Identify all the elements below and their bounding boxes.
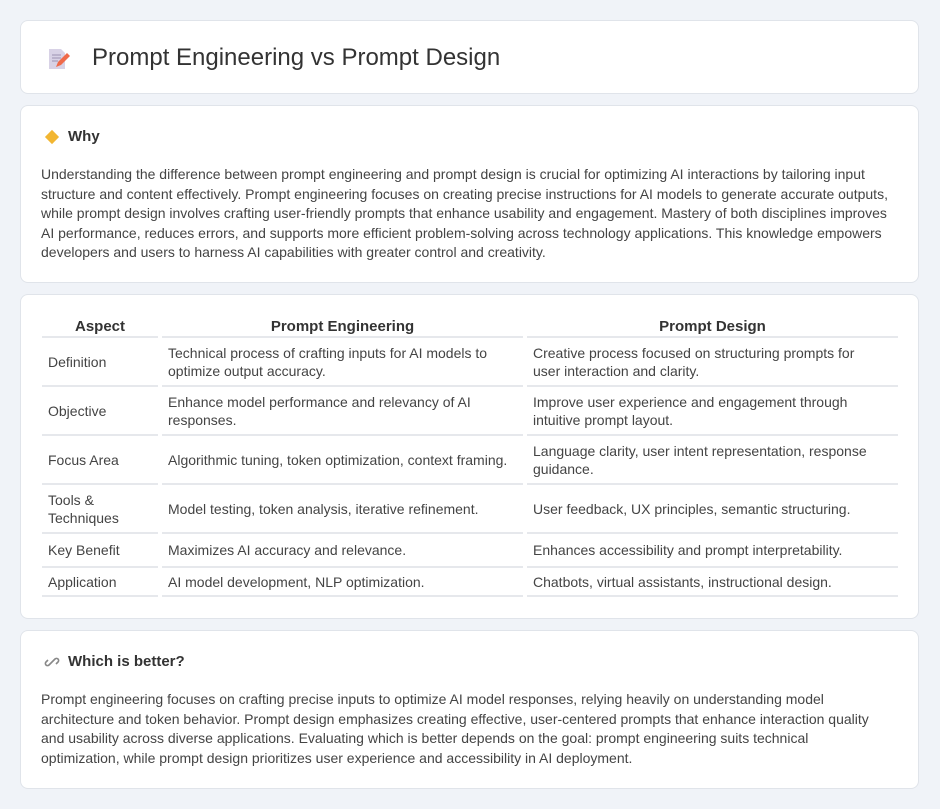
heading: why	[45, 128, 100, 145]
header card	[20, 20, 919, 94]
comparison table: Model testing, token analysis, iterative refinement.	[168, 500, 478, 516]
panel: comparison table	[20, 294, 919, 619]
icon: document pencil	[49, 49, 70, 69]
comparison table: Aspect	[75, 318, 125, 334]
heading: why: Why	[68, 128, 100, 145]
text: which is better: Prompt engineering focuses on crafting precise inputs to optimize AI model responses, relying heavily on understanding model architecture and token behavior. Prompt design emphasizes creating effective, user-centered prompts that enhance interaction quality and usability across diverse applications. Evaluating which is better depends on the goal: prompt engineering suits technical optimization, while prompt design prioritizes user experience and accessibility in AI deployment.	[41, 691, 869, 766]
comparison table: Objective	[48, 402, 106, 418]
comparison table	[42, 318, 898, 597]
panel: why	[20, 105, 919, 283]
comparison table: Application	[48, 574, 116, 590]
comparison table: Prompt Design	[659, 318, 766, 334]
comparison table: Maximizes AI accuracy and relevance.	[168, 542, 406, 558]
comparison table: Tools & Techniques	[48, 492, 119, 526]
comparison table: Creative process focused on structuring prompts for user interaction and clarity.	[533, 344, 854, 378]
comparison table: Algorithmic tuning, token optimization, context framing.	[168, 452, 507, 468]
comparison table: Improve user experience and engagement through intuitive prompt layout.	[533, 394, 847, 428]
comparison table: AI model development, NLP optimization.	[168, 574, 425, 590]
comparison table: Enhance model performance and relevancy of AI responses.	[168, 394, 471, 428]
panel: which is better	[20, 630, 919, 789]
comparison table: Language clarity, user intent representation, response guidance.	[533, 442, 867, 476]
comparison table: Definition	[48, 354, 106, 370]
comparison table: Chatbots, virtual assistants, instructional design.	[533, 574, 832, 590]
comparison table: Prompt Engineering	[271, 318, 414, 334]
text: why: Understanding the difference between prompt engineering and prompt design is crucial for optimizing AI interactions by tailoring input structure and content effectively. Prompt engineering focuses on creating precise instructions for AI models to generate accurate outputs, while prompt design involves crafting user-friendly prompts that enhance usability and engagement. Mastery of both disciplines improves AI performance, reduces errors, and supports more efficient problem-solving across technology applications. This knowledge empowers developers and users to harness AI capabilities with greater control and creativity.	[41, 166, 888, 260]
title: Prompt Engineering vs Prompt Design	[92, 44, 500, 71]
comparison table: Enhances accessibility and prompt interpretability.	[533, 542, 842, 558]
comparison table: Technical process of crafting inputs for AI models to optimize output accuracy.	[168, 344, 487, 378]
comparison table: Key Benefit	[48, 542, 120, 558]
heading: which is better: Which is better?	[68, 653, 185, 670]
comparison table: User feedback, UX principles, semantic structuring.	[533, 500, 850, 516]
comparison table: Focus Area	[48, 452, 119, 468]
